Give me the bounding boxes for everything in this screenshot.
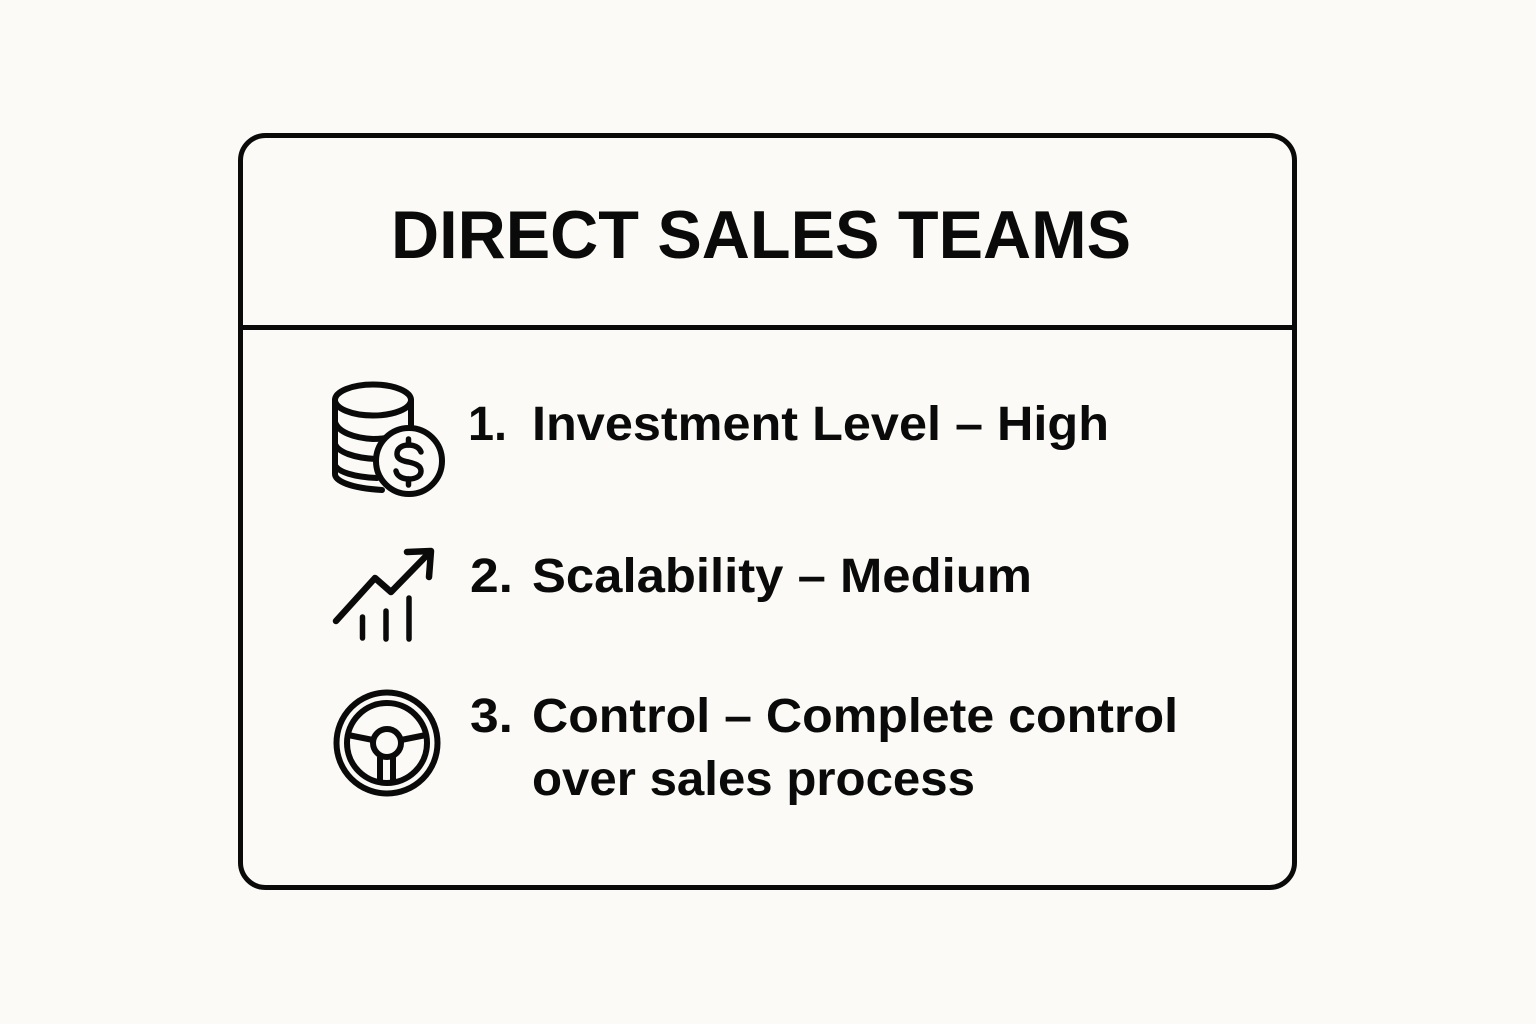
row 2: scalability <box>336 550 1032 639</box>
icon: coin stack with dollar <box>335 384 442 494</box>
text: scalability: 2. <box>470 550 513 603</box>
text: control: Control – Complete control <box>532 690 1178 743</box>
text: control <box>470 690 1178 806</box>
icon: steering wheel <box>336 692 438 794</box>
row 1: investment level <box>335 384 1109 494</box>
row 3: control <box>336 690 1178 806</box>
text: investment level: Investment Level – High <box>532 398 1109 451</box>
text: investment level: 1. <box>468 398 507 451</box>
title: DIRECT SALES TEAMS <box>391 197 1131 273</box>
text: scalability: Scalability – Medium <box>532 550 1032 603</box>
text: control: 3. <box>470 690 513 743</box>
panel: direct sales teams card <box>240 136 1294 888</box>
icon: growth arrow with bars <box>336 551 431 639</box>
text: control: over sales process <box>532 753 975 806</box>
